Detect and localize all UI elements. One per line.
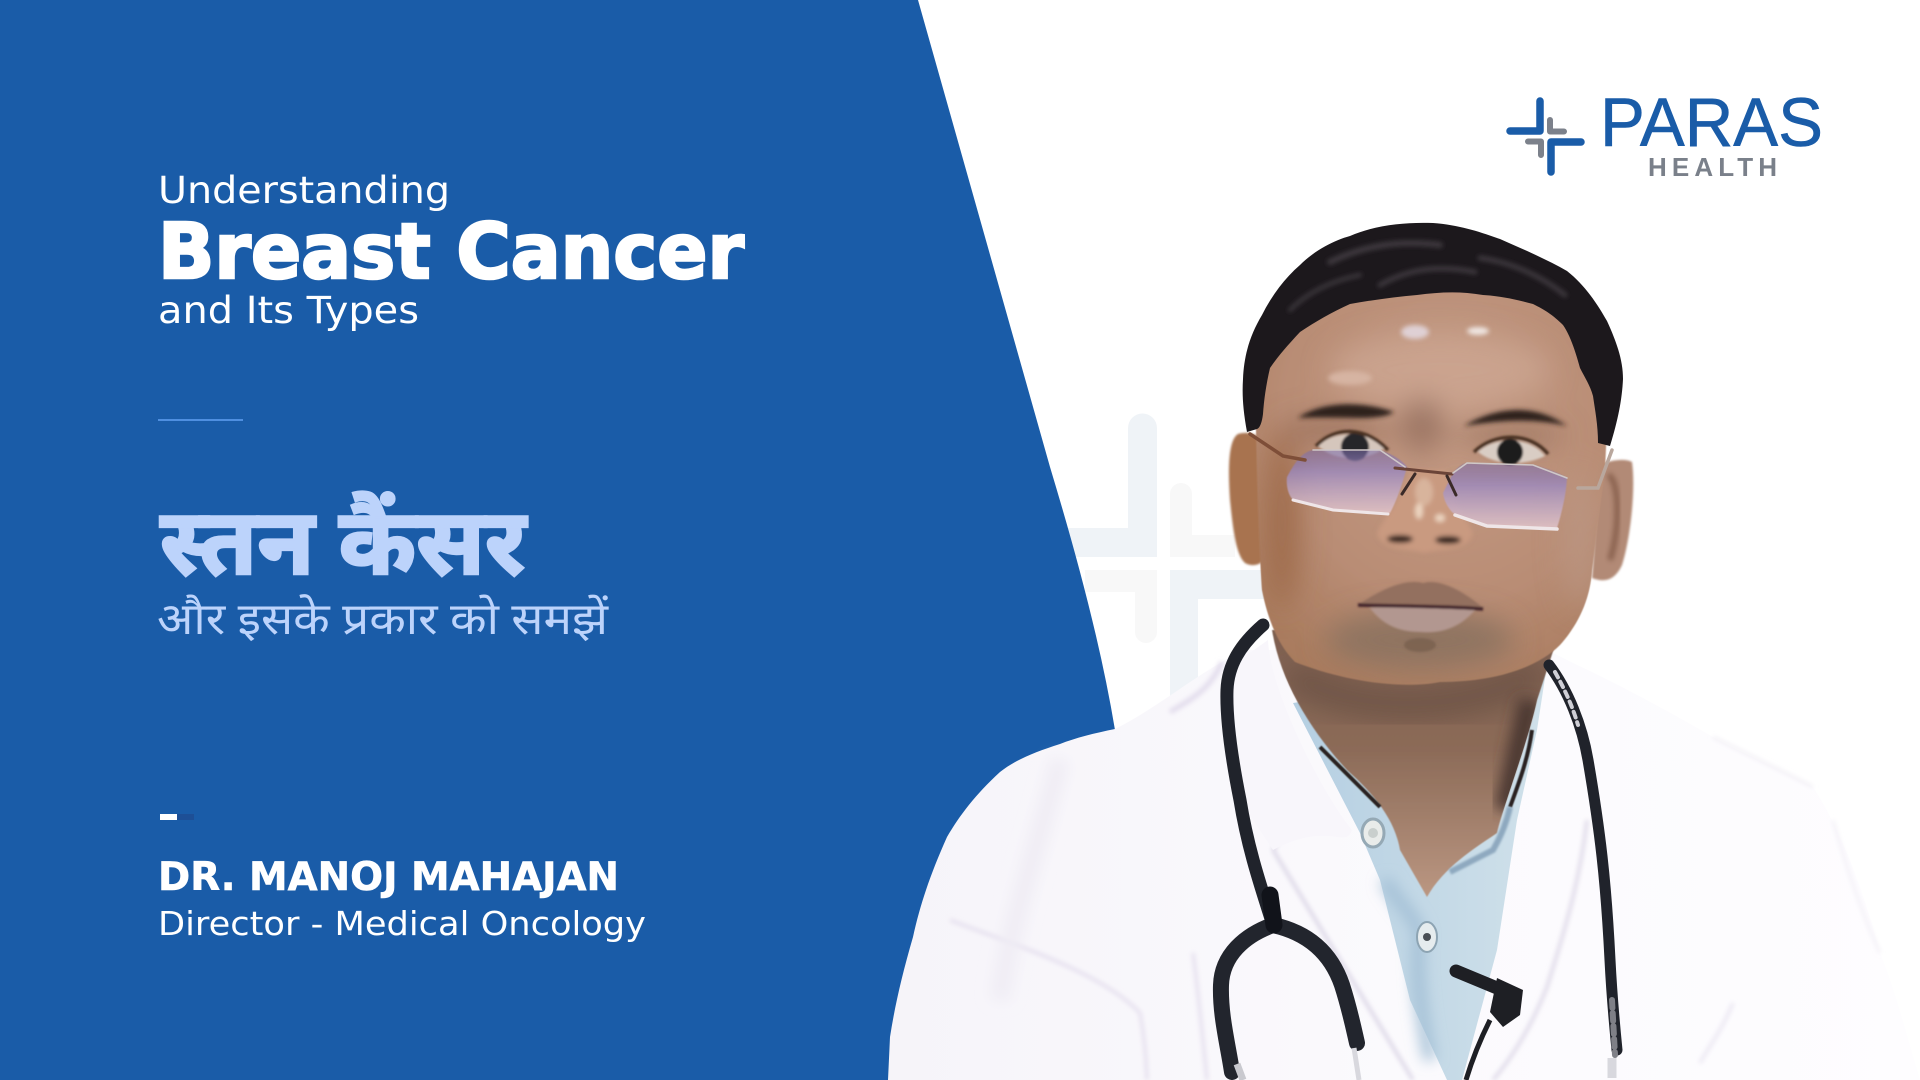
white coat: [888, 650, 1920, 1080]
lapel microphone: [1456, 971, 1523, 1080]
nose: [1377, 470, 1473, 553]
Hindi heading: स्तन कैंसर: [160, 491, 527, 612]
coat collar left: [1240, 640, 1352, 850]
eyebrows: [1298, 404, 1567, 426]
ears: [1229, 433, 1633, 580]
divider line: [158, 419, 243, 421]
lips: [1358, 582, 1483, 652]
hair: [1243, 223, 1623, 446]
logo: Paras Health: [1510, 84, 1823, 182]
logo wordmark HEALTH: HEALTH: [1648, 152, 1777, 182]
panel: blue background: [0, 0, 1115, 1080]
watermark logo: [1060, 414, 1270, 720]
accent dash: [160, 814, 194, 820]
title line: and Its Types: and Its Types: [158, 289, 419, 332]
doctor illustration: [888, 223, 1920, 1080]
neck: [1272, 630, 1560, 897]
eyes: [1316, 431, 1548, 465]
left lens: [1287, 450, 1407, 513]
shirt buttons: [1362, 819, 1437, 952]
title line: Breast Cancer: Breast Cancer: [158, 208, 744, 297]
frame: [1250, 434, 1612, 529]
shirt: [1293, 665, 1547, 1080]
stethoscope: [1221, 625, 1617, 1080]
hair sheen: [1290, 243, 1565, 310]
speaker role: Director - Medical Oncology: [158, 904, 646, 943]
glasses: [1250, 434, 1612, 529]
speaker name: DR. MANOJ MAHAJAN: [158, 855, 619, 900]
forehead highlights: [1328, 325, 1489, 385]
head: [1229, 223, 1633, 685]
cheek and forehead shading: [1264, 332, 1596, 670]
title line: Understanding: Understanding: [158, 169, 450, 212]
Hindi subheading: और इसके प्रकार को समझें: [157, 593, 609, 652]
icon: cross mark: [1510, 101, 1581, 172]
Hindi title block: [157, 491, 609, 652]
right lens: [1443, 463, 1567, 528]
logo wordmark PARAS: PARAS: [1600, 84, 1823, 161]
title block: [158, 169, 744, 332]
face: [1255, 290, 1610, 685]
coat shading: [950, 662, 1880, 1080]
